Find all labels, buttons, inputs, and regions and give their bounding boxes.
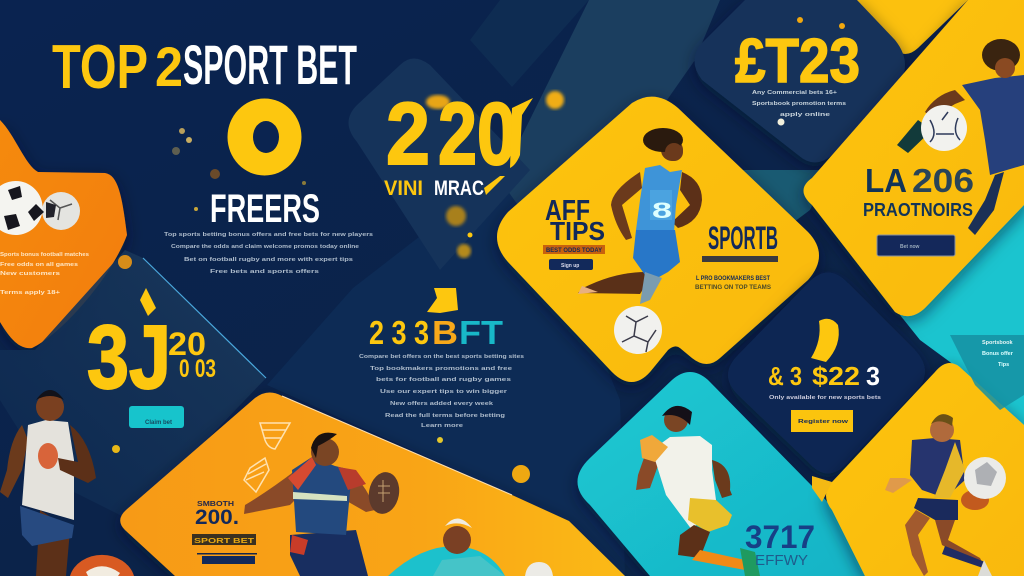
text block: freers: Compare the odds and claim welcome promos today online <box>171 244 359 250</box>
title: TOP <box>52 33 148 102</box>
heading: la 206: LA <box>865 162 907 199</box>
number: 30 <box>87 288 216 408</box>
heading: 2 3 3 bft <box>369 288 503 351</box>
panel: teal note box: Sportsbook <box>982 340 1013 346</box>
text block: navy card 2: Only available for new sports bets <box>769 395 881 401</box>
text block: navy card: Any Commercial bets 16+ <box>752 90 837 96</box>
athlete: teal card player <box>636 406 760 576</box>
text block: navy card: Sportsbook promotion terms <box>752 101 846 107</box>
heading: la 206: 206 <box>912 162 974 199</box>
text block: freers: Top sports betting bonus offers and free bets for new players <box>164 232 373 238</box>
text block: bft: New offers added every week <box>390 401 494 407</box>
text block: bft: Top bookmakers promotions and free <box>370 366 512 372</box>
text block: 200 offer <box>192 501 257 564</box>
subheading: vini mrac: VINI <box>384 177 423 200</box>
text block: 200 offer: SPORT BET <box>194 538 255 545</box>
panel: left orange blob <box>0 120 127 348</box>
text block: orange panel: Terms apply 18+ <box>0 290 60 296</box>
heading: sportb <box>695 220 778 291</box>
athlete: left player <box>0 390 96 576</box>
panel: lower navy card <box>728 272 925 474</box>
panel: left dark card <box>0 250 266 520</box>
text block: freers <box>164 232 373 275</box>
button: navy <box>549 259 593 270</box>
heading: la 206: PRAOTNOIRS <box>863 200 973 220</box>
panel: right yellow card <box>804 0 1024 316</box>
panel: upper center dark diamond <box>348 58 530 270</box>
panel: teal right background <box>880 190 1024 430</box>
heading: aff tips <box>543 195 605 254</box>
number: 30: 3J <box>87 308 171 408</box>
athlete: center runner: 8 <box>652 198 672 223</box>
icon: footballs left <box>0 181 80 235</box>
text block: bft: bets for football and rugby games <box>376 377 511 383</box>
button: teal: Claim bet <box>145 420 172 426</box>
text block: freers: Free bets and sports offers <box>210 269 319 275</box>
big number 2 20 <box>386 84 516 183</box>
athlete: upper right player <box>897 39 1024 235</box>
panel: lower orange card <box>120 392 625 576</box>
text block: bft: Use our expert tips to win bigger <box>380 389 508 395</box>
icon: rugby ball <box>366 470 402 516</box>
number: 30: 0 03 <box>179 355 216 383</box>
text block: orange panel: Free odds on all games <box>0 262 78 268</box>
button: promotion: Bet now <box>900 244 920 250</box>
number: 723 card: £T23 <box>735 27 860 96</box>
heading: navy card 2: $22 <box>812 361 860 391</box>
button: yellow <box>791 410 853 432</box>
text block: bft: Read the full terms before betting <box>385 413 505 419</box>
icon: football under runner <box>614 306 662 354</box>
title: 2 <box>155 35 183 98</box>
button: yellow: Register now <box>798 419 849 425</box>
athlete: center runner <box>578 128 702 304</box>
subheading: vini mrac <box>384 176 505 200</box>
heading: navy card 2: 3 <box>866 361 880 391</box>
icon: football right <box>921 105 967 151</box>
panel: lower right yellow card <box>826 363 1024 576</box>
text block: bft: Compare bet offers on the best sports betting sites <box>359 354 524 360</box>
heading: freers: FREERS <box>210 187 320 231</box>
band: lighter navy diagonal <box>470 0 880 360</box>
button: promotion <box>877 235 955 256</box>
title <box>52 33 357 102</box>
text block: freers: Bet on football rugby and more with expert tips <box>184 257 353 263</box>
small yellow connector <box>812 476 832 502</box>
heading: navy card 2: & 3 <box>768 361 802 391</box>
icon: football lower right <box>964 457 1006 499</box>
big yellow ring <box>228 98 302 176</box>
heading: 2 3 3 bft: B <box>432 314 458 351</box>
text block: bft: Learn more <box>421 423 463 429</box>
text block: navy card: apply online <box>780 112 830 118</box>
panel: lower teal card <box>578 372 865 576</box>
heading: 2 3 3 bft: FT <box>459 314 503 351</box>
text block: orange panel <box>0 252 89 296</box>
heading: sportb: BETTING ON TOP TEAMS <box>695 285 771 291</box>
athlete: lower right player <box>885 414 992 576</box>
heading: aff tips: BEST ODDS TODAY <box>546 248 602 254</box>
number: teal card: 3717 <box>745 519 815 555</box>
panel: teal note box: Tips <box>998 362 1009 368</box>
heading: 2 3 3 bft: 2 3 3 <box>369 314 429 351</box>
heading: sportb: SPORTB <box>708 220 778 256</box>
text block: navy card <box>752 90 846 118</box>
button: teal <box>129 406 184 428</box>
big number 2 20: 20 <box>438 84 516 183</box>
icon: small ball <box>525 562 553 576</box>
scattered dots <box>112 17 845 483</box>
panel: center yellow card <box>497 97 819 382</box>
panel: teal note box <box>950 335 1024 410</box>
panel: top navy card <box>694 0 905 162</box>
text block: 200 offer: SMBOTH <box>197 501 234 508</box>
big number 2 20: 2 <box>386 84 430 183</box>
panel: teal note box: Bonus offer <box>982 351 1014 357</box>
heading: sportb: L PRO BOOKMAKERS BEST <box>696 276 770 282</box>
panel: central navy field <box>267 180 625 576</box>
button: navy: Sign up <box>561 263 579 269</box>
heading: navy card 2 <box>768 319 880 391</box>
heading: aff tips: TIPS <box>550 216 605 246</box>
text block: bft <box>359 354 524 429</box>
panel: top small yellow <box>855 0 968 54</box>
yellow swoosh at card edge <box>510 98 533 168</box>
number: teal card: EFFWY <box>755 552 808 569</box>
text block: orange panel: Sports bonus football matches <box>0 252 89 258</box>
heading: la 206 <box>863 162 974 220</box>
heading: aff tips: AFF <box>545 195 590 227</box>
icons: outline shapes on orange <box>244 423 290 492</box>
athlete: capped man <box>388 518 505 576</box>
text block: orange panel: New customers <box>0 271 60 277</box>
number: 30: 20 <box>168 326 206 362</box>
title: SPORT BET <box>183 33 357 96</box>
text block: 200 offer: 200. <box>195 506 239 529</box>
athlete: rugby player <box>244 433 375 576</box>
icon: orange ball <box>70 555 134 576</box>
subheading: vini mrac: MRAC <box>434 177 484 200</box>
